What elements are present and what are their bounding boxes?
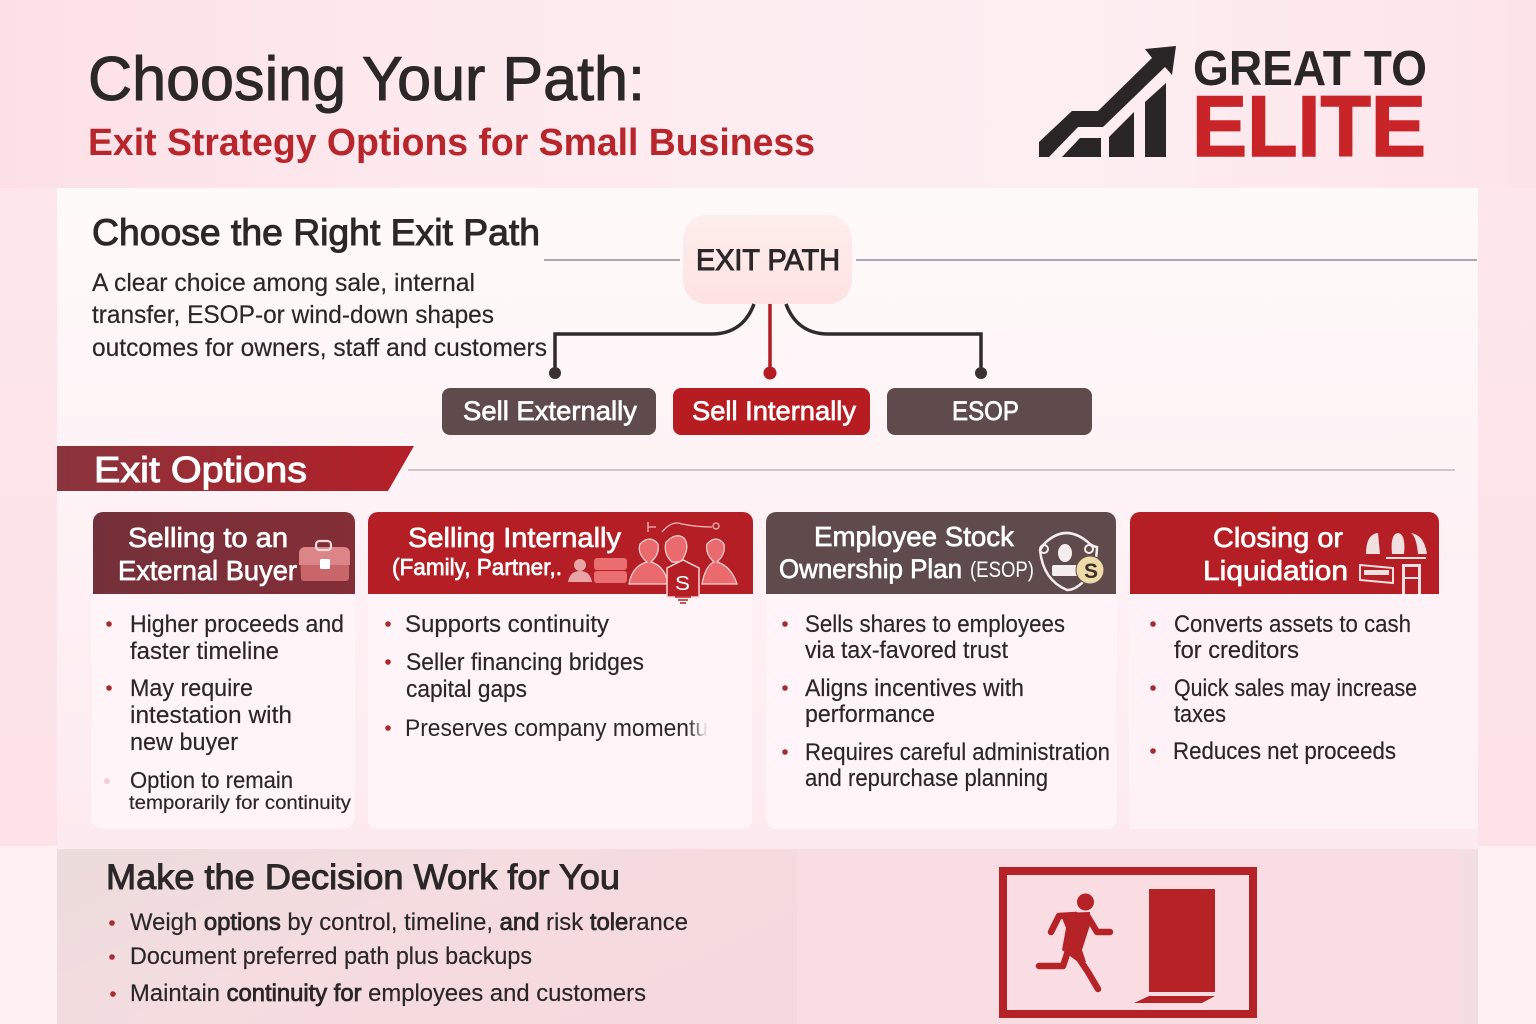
bullet 2: Document preferred path plus backups [130,943,532,970]
bullet list: faster timeline [130,638,279,665]
subtitle: Exit Strategy Options for Small Business [88,122,815,164]
card body [91,560,355,829]
card: closing or liquidation [1129,512,1478,829]
logo wordmark top: GREAT TO [1193,42,1427,96]
header title: Closing or [1213,522,1343,553]
description text: A clear choice among sale, internal [92,269,475,297]
description text: outcomes for owners, staff and customers [92,334,547,362]
bullet list [1150,611,1417,765]
icon: briefcase [299,541,350,581]
bullet list: and repurchase planning [805,765,1048,792]
card body [766,560,1117,829]
bullet list: Sells shares to employees [805,611,1065,638]
card: selling to an external buyer [91,512,355,829]
icon: rising arrow and bars [1039,46,1176,157]
connector to sell externally [549,304,754,379]
bullet list: for creditors [1174,637,1299,664]
header title [1203,522,1348,586]
card header [1130,512,1439,594]
bullet list: intestation with [130,702,292,729]
decision tree: exit path [442,215,1477,435]
header title: External Buyer [118,555,297,586]
panel: choose the right exit path [92,212,547,362]
exit path node [683,215,852,304]
icon: shield with employee and coin: S [1084,560,1098,583]
icon: emergency exit sign [1003,871,1253,1014]
bullet list: May require [130,675,253,702]
bullet list: new buyer [130,729,238,756]
running figure [1039,894,1110,989]
section banner: exit options [57,446,1455,491]
section banner: exit options: Exit Options [94,449,307,490]
bullet list: temporarily for continuity [129,793,352,814]
card body [368,560,752,829]
panel: make the decision work for you [57,849,797,1024]
exit path node: EXIT PATH [696,244,840,277]
bullet list [385,611,708,742]
bullet list [104,611,352,814]
logo wordmark bottom: ELITE [1192,79,1426,175]
icon: family group with money badge [629,522,737,603]
header subtitle: (Family, Partner,. [392,554,562,580]
bullet list [782,611,1110,792]
bullet list: Converts assets to cash [1174,611,1411,638]
card header [766,512,1116,594]
button: ESOP: ESOP [952,396,1019,426]
card: selling internally [368,512,753,829]
card header [368,512,753,594]
icon: shield with employee and coin [1040,533,1104,590]
button: sell internally: Sell Internally [692,396,856,426]
bullet list: Quick sales may increase [1174,675,1417,702]
bullet 3: Maintain continuity for employees and customers [130,980,646,1007]
bullet list: via tax-favored trust [805,637,1008,664]
bullet list: Aligns incentives with [805,675,1024,702]
header title: Selling Internally [408,522,621,553]
bullet list: taxes [1174,701,1226,728]
button: sell externally [442,388,656,435]
button: ESOP [887,388,1092,435]
icon: closed storefront [1360,533,1427,594]
bullet list: capital gaps [406,676,527,703]
connector to sell internally [764,304,776,380]
bullet list: Preserves company momentu [405,715,708,742]
title block [88,45,815,164]
panel: exit sign background [797,849,1478,1024]
bullet list: performance [805,701,935,728]
main title: Choosing Your Path: [88,45,645,114]
panel background [57,849,797,1024]
heading: Choose the Right Exit Path [92,212,540,253]
icon: family group with money badge: S [675,573,690,595]
card header [93,512,355,594]
header title [118,522,297,586]
connector to ESOP [786,304,987,379]
bullet list: Reduces net proceeds [1173,738,1396,765]
card: employee stock ownership plan [766,512,1117,829]
bullet list: Supports continuity [405,611,609,638]
bullet list: Requires careful administration [805,739,1110,766]
panel: main content [57,188,1478,849]
header subtitle: (ESOP) [970,557,1034,582]
description text [92,269,547,362]
bullet list: Seller financing bridges [406,649,644,676]
heading: Make the Decision Work for You [106,858,620,897]
bullet list: Higher proceeds and [130,611,344,638]
header title: Selling to an [128,522,288,553]
bullet list: Option to remain [130,767,293,793]
header title: Liquidation [1203,555,1348,586]
bullet 1: Weigh options by control, timeline, and risk tolerance [130,909,688,936]
sign frame [1003,871,1253,1014]
horizontal rule right [856,259,1477,261]
button: sell externally: Sell Externally [463,396,638,426]
horizontal rule left [544,259,680,261]
door [1149,889,1215,992]
header subtitle: Ownership Plan [779,554,962,584]
icon: person and folder [568,558,627,583]
button: sell internally [673,388,870,435]
header title: Employee Stock [814,521,1015,552]
card body [1129,560,1478,829]
door threshold [1134,996,1215,1003]
logo: Great to Elite [1039,42,1427,175]
description text: transfer, ESOP-or wind-down shapes [92,301,494,329]
